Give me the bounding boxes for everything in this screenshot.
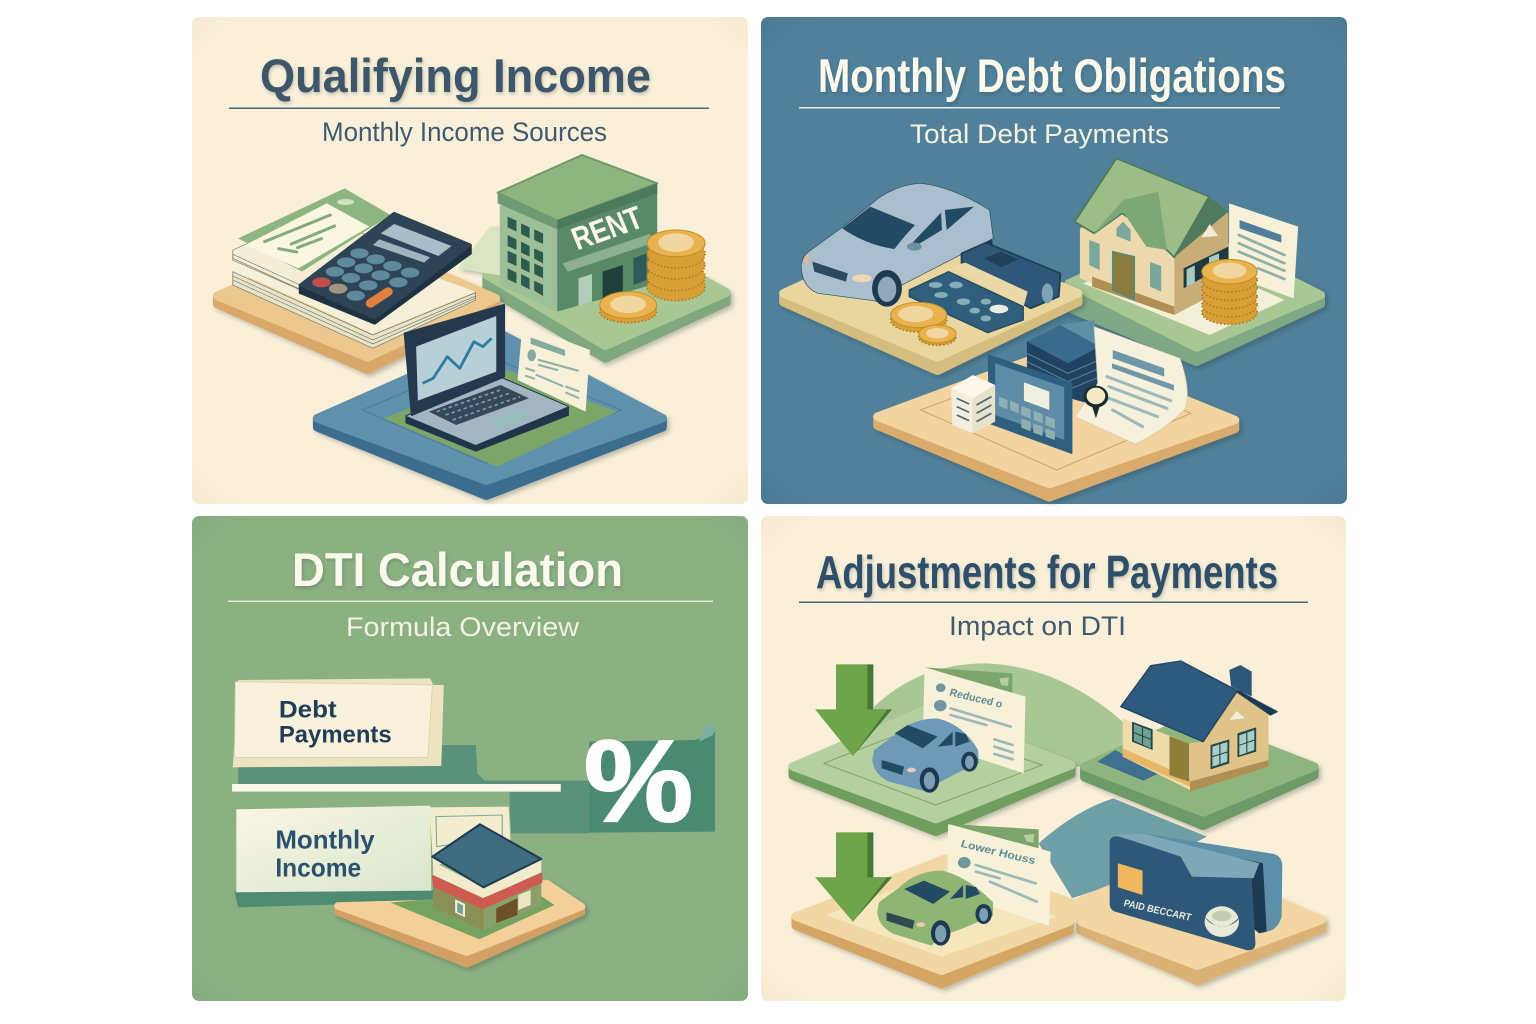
rent sign: RENT bbox=[566, 199, 648, 257]
label: monthly: Monthly bbox=[275, 825, 375, 854]
card text: Reduced o bbox=[948, 687, 1004, 711]
icon: credit card wallet: PAID BECCART bbox=[1122, 898, 1193, 924]
platform: green bbox=[458, 212, 726, 358]
icon: tablet bbox=[988, 355, 1072, 453]
card: lower housing: Lower Houss bbox=[959, 838, 1037, 867]
platform: peach bbox=[878, 349, 1234, 497]
icon: paper stack bbox=[233, 188, 476, 348]
icon: small house bbox=[432, 824, 542, 931]
platform: sand bbox=[338, 883, 581, 964]
icon: rent building bbox=[498, 155, 657, 312]
icon: house bbox=[1075, 158, 1228, 315]
panel: qualifying income bbox=[192, 17, 748, 504]
icon: laptop bbox=[405, 305, 568, 451]
subheading: impact on dti: Impact on DTI bbox=[949, 611, 1126, 641]
label: payments: Payments bbox=[279, 722, 392, 748]
backdrop: teal blob bbox=[1039, 798, 1207, 898]
platform join: tan bbox=[1050, 885, 1110, 921]
illustration: formula bbox=[232, 678, 715, 964]
arrow: down, bottom bbox=[815, 832, 892, 922]
subheading: total debt payments: Total Debt Payments bbox=[910, 119, 1169, 149]
icon: curled document bbox=[1075, 327, 1187, 444]
icon: location pin bbox=[1084, 386, 1108, 418]
icon: wallet and cards bbox=[909, 243, 1060, 333]
platform: green left bbox=[793, 709, 1071, 832]
icon: blue car bbox=[872, 718, 979, 793]
percent sign: % bbox=[584, 716, 693, 846]
building windows bbox=[508, 217, 543, 296]
icon: server stack bbox=[1027, 320, 1100, 407]
icon: income document bbox=[518, 324, 590, 412]
card: monthly income bbox=[235, 806, 510, 907]
subheading: monthly income sources: Monthly Income Sources bbox=[322, 117, 607, 147]
heading: dti calculation: DTI Calculation bbox=[292, 543, 623, 596]
panel: adjustments for payments bbox=[761, 516, 1346, 1001]
subheading: formula overview: Formula Overview bbox=[346, 612, 580, 642]
platform: sand bbox=[784, 229, 1078, 371]
ribbon: percent backdrop bbox=[589, 732, 715, 833]
panel background bbox=[192, 17, 748, 504]
icon: single coin bbox=[600, 292, 657, 323]
heading: monthly debt obligations: Monthly Debt Obligations bbox=[818, 49, 1286, 102]
arrow: down, top bbox=[815, 664, 892, 756]
illustration: income sources bbox=[218, 155, 726, 496]
panel: dti calculation bbox=[192, 516, 748, 1001]
panel background bbox=[761, 17, 1347, 504]
icon: coin stack bbox=[647, 230, 705, 301]
label: income: Income bbox=[275, 853, 361, 882]
icon: mortgage document bbox=[1229, 203, 1298, 298]
card: reduced bbox=[923, 667, 1026, 773]
icon: blue house bbox=[1097, 661, 1277, 792]
fraction bar bbox=[232, 784, 561, 792]
platform: blue bbox=[318, 336, 662, 496]
car wheel bbox=[872, 270, 902, 307]
platform: tan left bbox=[796, 859, 1069, 984]
icon: car bbox=[801, 183, 993, 307]
illustration: adjustments bbox=[793, 661, 1321, 984]
platform: green bbox=[1069, 229, 1320, 362]
backdrop: green hill bbox=[874, 663, 1125, 767]
icon: credit card wallet bbox=[1110, 833, 1282, 950]
card: lower housing bbox=[947, 824, 1051, 926]
platform: tan bbox=[218, 236, 496, 370]
icon: calculator bbox=[300, 213, 470, 323]
panel: monthly debt obligations bbox=[761, 17, 1347, 504]
icon: green car bbox=[877, 871, 993, 946]
panel background bbox=[192, 516, 748, 1001]
label: debt: Debt bbox=[279, 697, 337, 723]
icon: tall coin stack bbox=[1202, 259, 1257, 324]
ribbon: fraction backdrop bbox=[238, 745, 589, 833]
icon: paper block bbox=[951, 375, 995, 433]
heading: adjustments for payments: Adjustments for Payments bbox=[816, 546, 1278, 598]
card: debt payments bbox=[233, 678, 444, 767]
illustration: debts bbox=[784, 158, 1320, 497]
panel background bbox=[761, 516, 1346, 1001]
icon: coins bbox=[891, 302, 956, 345]
platform: tan right bbox=[1081, 872, 1321, 981]
platform: green right bbox=[1085, 719, 1314, 826]
heading: qualifying income: Qualifying Income bbox=[260, 49, 651, 102]
